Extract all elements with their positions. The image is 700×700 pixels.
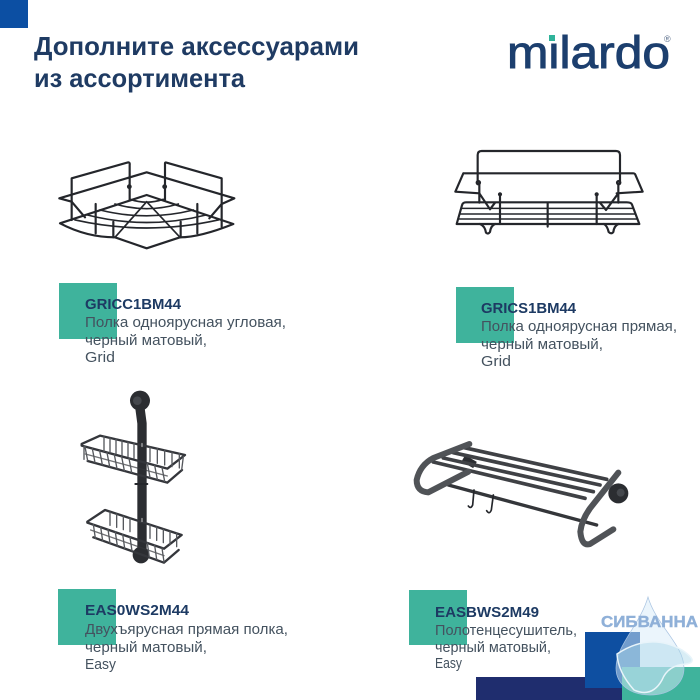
label: EAS0WS2M44: [58, 589, 288, 673]
label: EAS0WS2M44: Двухъярусная прямая полка,: [85, 622, 288, 638]
bottom decorative blocks: [476, 632, 700, 700]
product image: two-tier shelf: [82, 391, 185, 563]
logo: milardo: ®: [664, 34, 671, 44]
label: EASBWS2M49: [409, 590, 577, 672]
label: EASBWS2M49: Полотенцесушитель,: [435, 623, 577, 639]
watermark: Сибванна: СИБВАННА: [601, 614, 698, 631]
label: GRICS1BM44: GRICS1BM44: [481, 301, 576, 317]
label: EAS0WS2M44: Easy: [85, 657, 117, 673]
title: [34, 31, 359, 93]
label: GRICS1BM44: Полка одноярусная прямая,: [481, 319, 677, 335]
title: Дополните аксессуарами: [34, 31, 359, 61]
watermark: Сибванна: [601, 597, 698, 695]
label: EAS0WS2M44: EAS0WS2M44: [85, 603, 189, 619]
title: из ассортимента: [34, 63, 246, 93]
label: GRICC1BM44: [59, 283, 286, 366]
logo: milardo: milardo: [507, 27, 670, 78]
label: GRICS1BM44: черный матовый,: [481, 337, 603, 353]
label: EASBWS2M49: EASBWS2M49: [435, 605, 539, 621]
label: GRICS1BM44: Grid: [481, 354, 511, 370]
label: GRICC1BM44: черный матовый,: [85, 333, 207, 349]
label: GRICC1BM44: Полка одноярусная угловая,: [85, 315, 286, 331]
corner square: [0, 0, 28, 28]
label: EASBWS2M49: Easy: [435, 656, 463, 672]
label: EASBWS2M49: черный матовый,: [435, 640, 551, 656]
product image: straight shelf: [455, 151, 643, 234]
label: GRICC1BM44: GRICC1BM44: [85, 297, 181, 313]
label: GRICC1BM44: Grid: [85, 350, 115, 366]
label: EAS0WS2M44: черный матовый,: [85, 640, 207, 656]
product image: corner shelf: [59, 162, 234, 248]
product image: towel rack: [417, 444, 628, 544]
label: GRICS1BM44: [456, 287, 677, 370]
